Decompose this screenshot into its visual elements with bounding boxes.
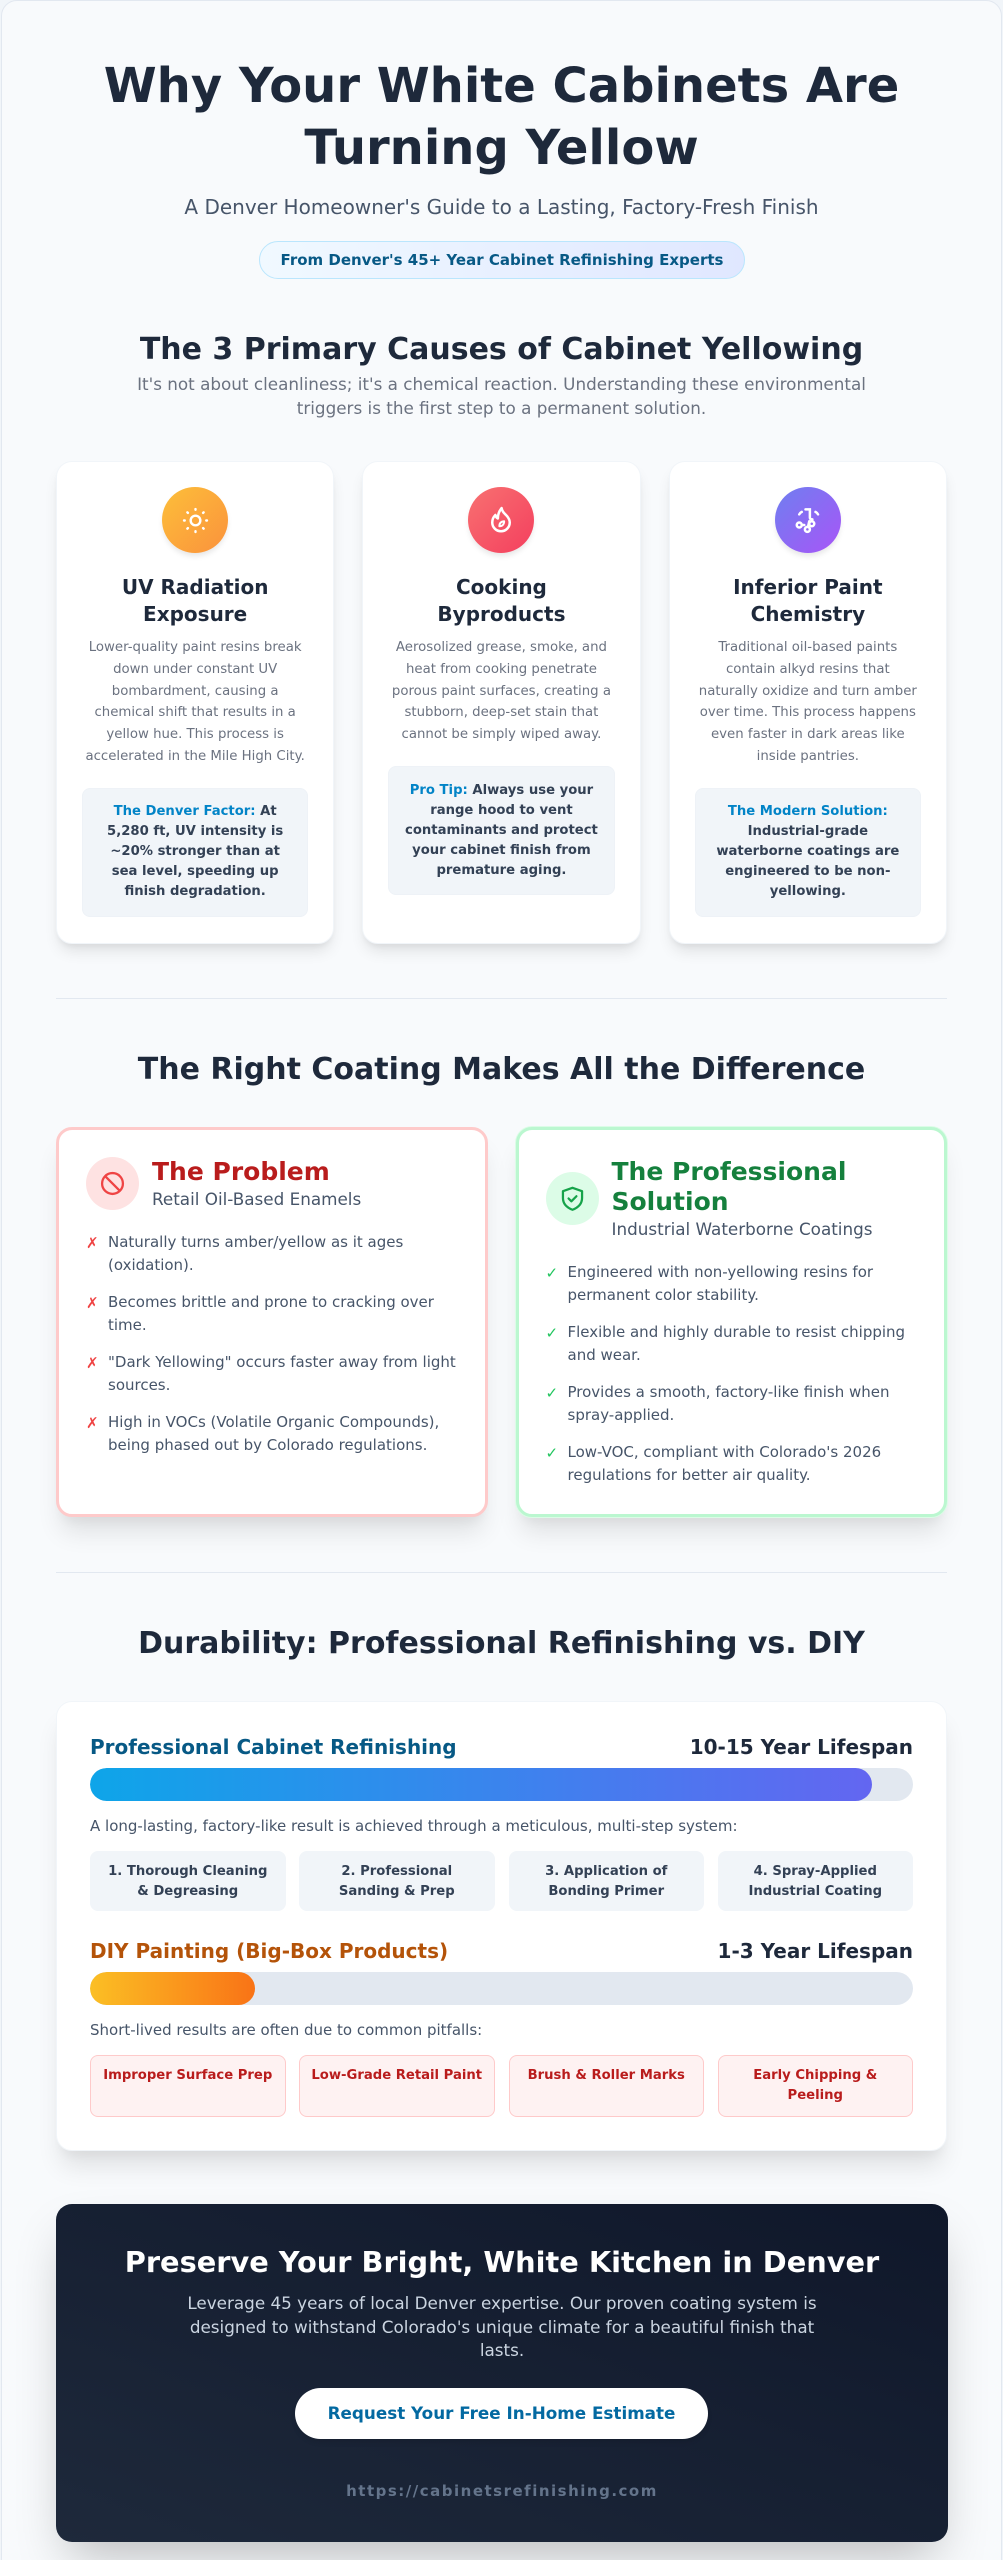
step 4: Industrial Coating: [748, 1884, 882, 1899]
label: DIY painting: DIY Painting (Big-Box Products): [90, 1939, 448, 1963]
card body: Traditional oil-based paints contain alkyd resins that naturally oxidize and turn amber over time. This process happens even faster in dark areas like inside pantries.: [699, 640, 917, 764]
heading: causes: The 3 Primary Causes of Cabinet Yellowing: [140, 332, 863, 367]
icon: molecule: [775, 487, 841, 553]
panel: the professional solution: [516, 1127, 947, 1517]
card title: Cooking: [456, 575, 547, 599]
bar: DIY lifespan: [90, 1972, 913, 2005]
pitfall 4: Early Chipping &: [753, 2068, 877, 2083]
causes intro text: [137, 374, 866, 418]
card title: [733, 575, 883, 626]
text: DIY pitfalls: Short-lived results are often due to common pitfalls:: [90, 2021, 482, 2039]
card title: Chemistry: [751, 602, 865, 626]
card title: Inferior Paint: [733, 575, 883, 599]
callout: modern solution: The Modern Solution: Industrial-grade waterborne coatings are engineered to be non-yellowing.: [716, 804, 899, 899]
icon: ban: [86, 1157, 139, 1210]
causes intro text: triggers is the first step to a permanent solution.: [297, 398, 706, 418]
step 1: [90, 1851, 286, 1911]
problem subtitle: Retail Oil-Based Enamels: [152, 1189, 361, 1209]
step 4: 4. Spray-Applied: [754, 1864, 877, 1879]
icon: shield check: [546, 1172, 598, 1225]
value: professional lifespan: 10-15 Year Lifespan: [690, 1735, 913, 1759]
check mark: ✓: [546, 1324, 558, 1342]
website URL: https://cabinetsrefinishing.com: [346, 2482, 658, 2500]
pitfall 2: Low-Grade Retail Paint: [311, 2068, 482, 2083]
callout: modern solution: [695, 788, 921, 917]
subtitle: A Denver Homeowner's Guide to a Lasting, Factory-Fresh Finish: [184, 195, 819, 219]
list item: "Dark Yellowing" occurs faster away from light sources.: [108, 1352, 456, 1394]
bar: professional lifespan: [90, 1768, 913, 1801]
CTA heading: Preserve Your Bright, White Kitchen in Denver: [125, 2245, 879, 2279]
check mark: ✓: [546, 1384, 558, 1402]
CTA text: Leverage 45 years of local Denver expertise. Our proven coating system is designed to withstand Colorado's unique climate for a beautiful finish that lasts.: [187, 2293, 817, 2360]
check mark: ✓: [546, 1444, 558, 1462]
card title: Byproducts: [437, 602, 565, 626]
pitfall 1: [90, 2055, 286, 2117]
value: DIY lifespan: 1-3 Year Lifespan: [718, 1939, 913, 1963]
card body: Lower-quality paint resins break down under constant UV bombardment, causing a chemical shift that results in a yellow hue. This process is accelerated in the Mile High City.: [85, 640, 305, 764]
CTA button: [295, 2388, 708, 2439]
label: professional refinishing: Professional Cabinet Refinishing: [90, 1735, 457, 1759]
text: professional system: A long-lasting, factory-like result is achieved through a meticulous, multi-step system:: [90, 1817, 738, 1835]
step 3: Bonding Primer: [548, 1884, 664, 1899]
card title: [122, 575, 268, 626]
step 4: [718, 1851, 913, 1911]
causes intro text: It's not about cleanliness; it's a chemical reaction. Understanding these environmental: [137, 374, 866, 394]
step 1: & Degreasing: [137, 1884, 238, 1899]
problem title: The Problem: [152, 1157, 330, 1186]
callout: pro tip: Pro Tip: Always use your range hood to vent contaminants and protect your cabinet finish from premature aging.: [405, 783, 598, 878]
panel: cooking byproducts cause: [362, 461, 641, 944]
badge: experts: From Denver's 45+ Year Cabinet Refinishing Experts: [281, 251, 723, 269]
step 3: 3. Application of: [545, 1864, 667, 1879]
cross mark: ✗: [86, 1414, 99, 1432]
badge: experts: [259, 241, 745, 279]
step 1: 1. Thorough Cleaning: [108, 1864, 267, 1879]
pitfall 1: Improper Surface Prep: [103, 2068, 272, 2083]
callout: Denver factor: The Denver Factor: At 5,280 ft, UV intensity is ~20% stronger than at sea level, speeding up finish degradation.: [107, 804, 283, 899]
solution title: The Professional Solution: [612, 1157, 846, 1216]
panel: call to action: [56, 2204, 948, 2542]
list item: Becomes brittle and prone to cracking over time.: [108, 1292, 434, 1334]
callout: pro tip: [388, 766, 615, 895]
list item: Provides a smooth, factory-like finish when spray-applied.: [568, 1382, 890, 1424]
cross mark: ✗: [86, 1234, 99, 1252]
cross mark: ✗: [86, 1294, 99, 1312]
pitfall 3: Brush & Roller Marks: [528, 2068, 685, 2083]
step 2: Sanding & Prep: [339, 1884, 455, 1899]
list item: Flexible and highly durable to resist chipping and wear.: [568, 1322, 905, 1364]
solution list: [546, 1262, 905, 1484]
step 3: [508, 1851, 704, 1911]
list item: High in VOCs (Volatile Organic Compounds), being phased out by Colorado regulations.: [108, 1412, 439, 1454]
pitfall 2: [299, 2055, 494, 2117]
list item: Engineered with non-yellowing resins for permanent color stability.: [568, 1262, 873, 1304]
list item: Naturally turns amber/yellow as it ages (oxidation).: [108, 1232, 403, 1274]
card title: [437, 575, 565, 626]
title: Why Your White Cabinets Are: [104, 58, 899, 114]
cross mark: ✗: [86, 1354, 99, 1372]
check mark: ✓: [546, 1264, 558, 1282]
problem list: [86, 1232, 456, 1454]
pitfall 4: Peeling: [788, 2088, 843, 2103]
CTA button: Request Your Free In-Home Estimate: [328, 2403, 675, 2423]
card title: Exposure: [143, 602, 247, 626]
pitfall 3: [508, 2055, 704, 2117]
panel: durability comparison: [56, 1701, 947, 2151]
callout: Denver factor: [82, 788, 308, 917]
icon: sun: [162, 487, 228, 553]
list item: Low-VOC, compliant with Colorado's 2026 regulations for better air quality.: [568, 1442, 881, 1484]
title: Turning Yellow: [304, 120, 699, 176]
step 2: [299, 1851, 494, 1911]
heading: coating: The Right Coating Makes All the Difference: [138, 1052, 865, 1087]
card title: UV Radiation: [122, 575, 268, 599]
heading: durability: Durability: Professional Refinishing vs. DIY: [138, 1626, 865, 1661]
panel: UV radiation cause: [56, 461, 334, 944]
card body: Aerosolized grease, smoke, and heat from cooking penetrate porous paint surfaces, creating a stubborn, deep-set stain that cannot be simply wiped away.: [392, 640, 611, 742]
panel: the problem: [56, 1127, 488, 1517]
panel: inferior paint chemistry cause: [669, 461, 947, 944]
solution subtitle: Industrial Waterborne Coatings: [612, 1219, 873, 1239]
step 2: 2. Professional: [341, 1864, 452, 1879]
icon: flame: [468, 487, 534, 553]
title: [104, 58, 899, 176]
pitfall 4: [718, 2055, 913, 2117]
